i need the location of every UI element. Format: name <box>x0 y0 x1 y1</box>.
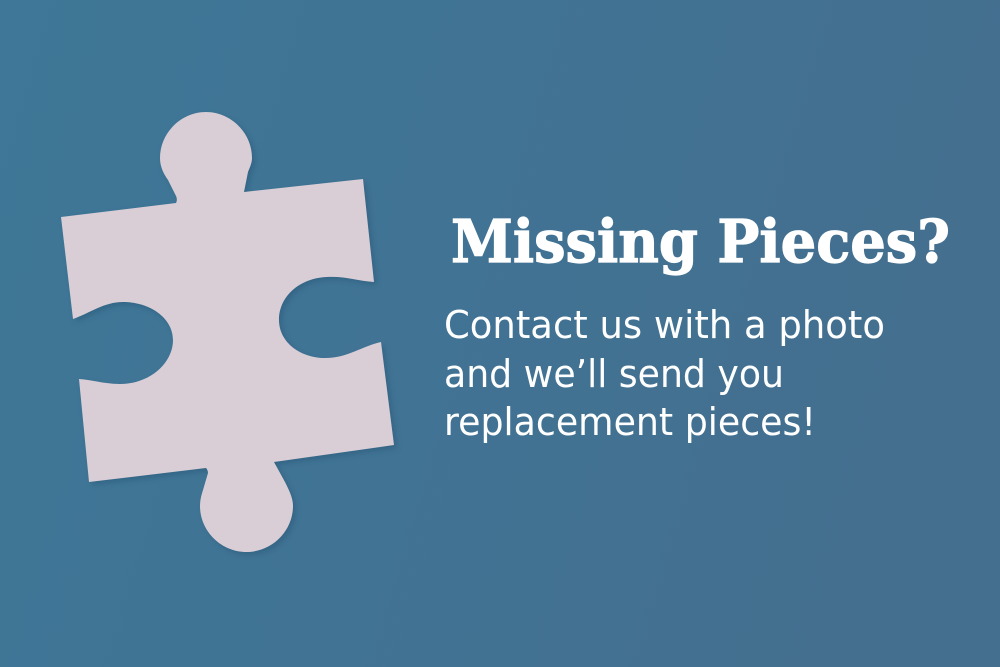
body text: Contact us with a photo <box>444 303 885 347</box>
icon: puzzle piece <box>61 112 397 555</box>
body text: replacement pieces! <box>444 400 816 444</box>
body text <box>444 303 885 444</box>
body text: and we’ll send you <box>444 352 784 396</box>
title: Missing Pieces? <box>451 207 950 276</box>
